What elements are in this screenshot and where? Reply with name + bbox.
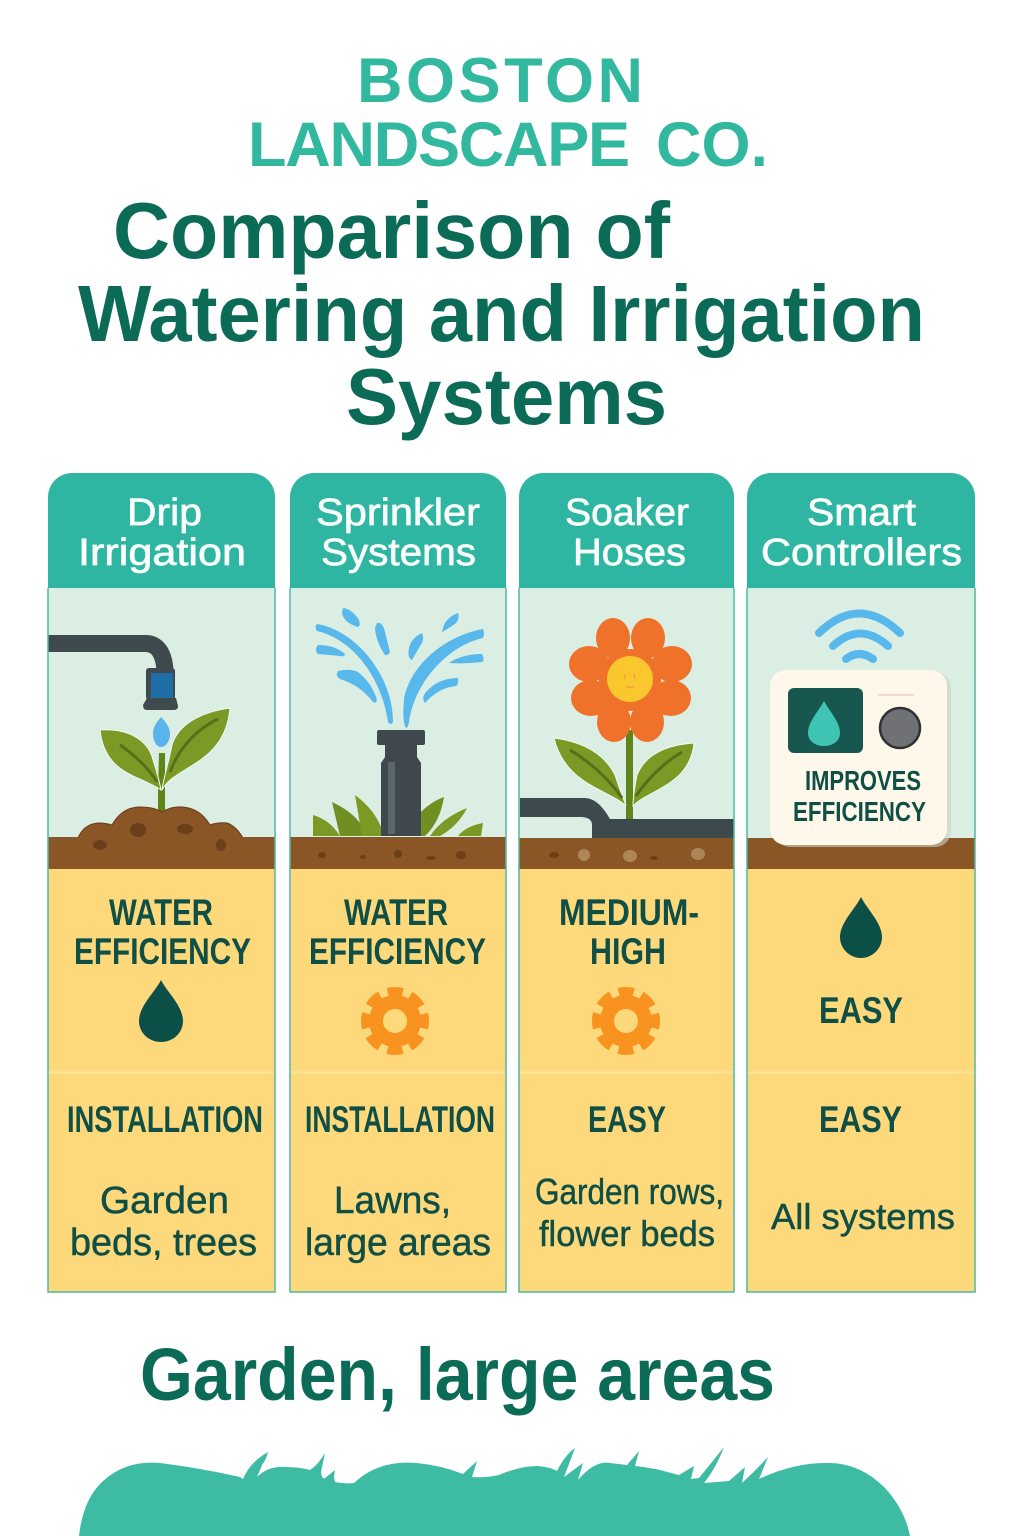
column header: smart controllers: Smart bbox=[807, 492, 916, 534]
water efficiency and installation cells: INSTALLATION bbox=[67, 1099, 263, 1140]
water efficiency and installation cells bbox=[290, 869, 506, 1292]
water efficiency and installation cells: EFFICIENCY bbox=[74, 931, 251, 972]
column header: soaker hoses: Hoses bbox=[573, 532, 686, 574]
column header: sprinkler systems: Sprinkler bbox=[316, 492, 480, 534]
efficiency and installation cells bbox=[519, 869, 734, 1292]
water efficiency and installation cells: large areas bbox=[305, 1222, 491, 1264]
column header: drip irrigation bbox=[48, 473, 275, 588]
water efficiency and installation cells: INSTALLATION bbox=[305, 1099, 495, 1140]
water efficiency and installation cells: Lawns, bbox=[334, 1180, 451, 1222]
brand name: LANDSCAPE bbox=[248, 110, 630, 180]
efficiency and installation cells: All systems bbox=[771, 1196, 955, 1237]
panel: drip irrigation bbox=[48, 473, 275, 1292]
controller device: EFFICIENCY bbox=[793, 796, 926, 827]
water efficiency and installation cells: Garden bbox=[100, 1180, 229, 1222]
efficiency and installation cells bbox=[747, 869, 975, 1292]
title bbox=[78, 186, 925, 441]
brand name bbox=[248, 46, 768, 180]
brand name: CO. bbox=[656, 110, 768, 180]
column header: drip irrigation: Irrigation bbox=[78, 532, 246, 574]
water efficiency and installation cells bbox=[48, 869, 275, 1292]
efficiency and installation cells: MEDIUM- bbox=[559, 892, 699, 933]
column header: sprinkler systems bbox=[290, 473, 506, 588]
icon: gear bbox=[366, 992, 424, 1050]
soil band bbox=[519, 838, 734, 869]
title: Watering and Irrigation bbox=[78, 269, 925, 358]
column header: soaker hoses: Soaker bbox=[565, 492, 689, 534]
efficiency and installation cells: flower beds bbox=[539, 1213, 715, 1254]
efficiency and installation cells: EASY bbox=[588, 1099, 666, 1140]
soil band bbox=[290, 837, 506, 869]
column header: sprinkler systems: Systems bbox=[321, 532, 476, 574]
panel: smart controllers bbox=[747, 473, 975, 1292]
panel: soaker hoses bbox=[519, 473, 734, 1292]
title: Systems bbox=[346, 352, 667, 441]
column header: soaker hoses bbox=[519, 473, 734, 588]
controller device: IMPROVES bbox=[805, 765, 921, 796]
column header: smart controllers bbox=[747, 473, 975, 588]
efficiency and installation cells: HIGH bbox=[590, 931, 666, 972]
water efficiency and installation cells: WATER bbox=[109, 892, 213, 933]
column header: smart controllers: Controllers bbox=[761, 532, 962, 574]
soil band bbox=[747, 838, 975, 869]
water efficiency and installation cells: beds, trees bbox=[70, 1222, 257, 1264]
controller device bbox=[770, 670, 951, 847]
efficiency and installation cells: Garden rows, bbox=[535, 1171, 724, 1212]
footer summary text: Garden, large areas bbox=[140, 1333, 775, 1416]
water efficiency and installation cells: WATER bbox=[344, 892, 448, 933]
efficiency and installation cells: EASY bbox=[819, 1099, 902, 1140]
grass hill bbox=[79, 1447, 910, 1536]
panel: sprinkler systems bbox=[290, 473, 506, 1292]
soil band bbox=[48, 823, 275, 869]
title: Comparison of bbox=[113, 186, 670, 275]
illustration: wifi signal bbox=[747, 588, 975, 838]
brand name: BOSTON bbox=[357, 46, 643, 116]
column header: drip irrigation: Drip bbox=[127, 492, 202, 534]
water efficiency and installation cells: EFFICIENCY bbox=[309, 931, 486, 972]
illustration: flower and soaker hose bbox=[519, 588, 734, 839]
illustration: sprinkler head bbox=[290, 588, 506, 838]
illustration: dripper and seedling bbox=[48, 588, 275, 838]
efficiency and installation cells: EASY bbox=[819, 990, 903, 1031]
icon: gear bbox=[596, 992, 656, 1050]
